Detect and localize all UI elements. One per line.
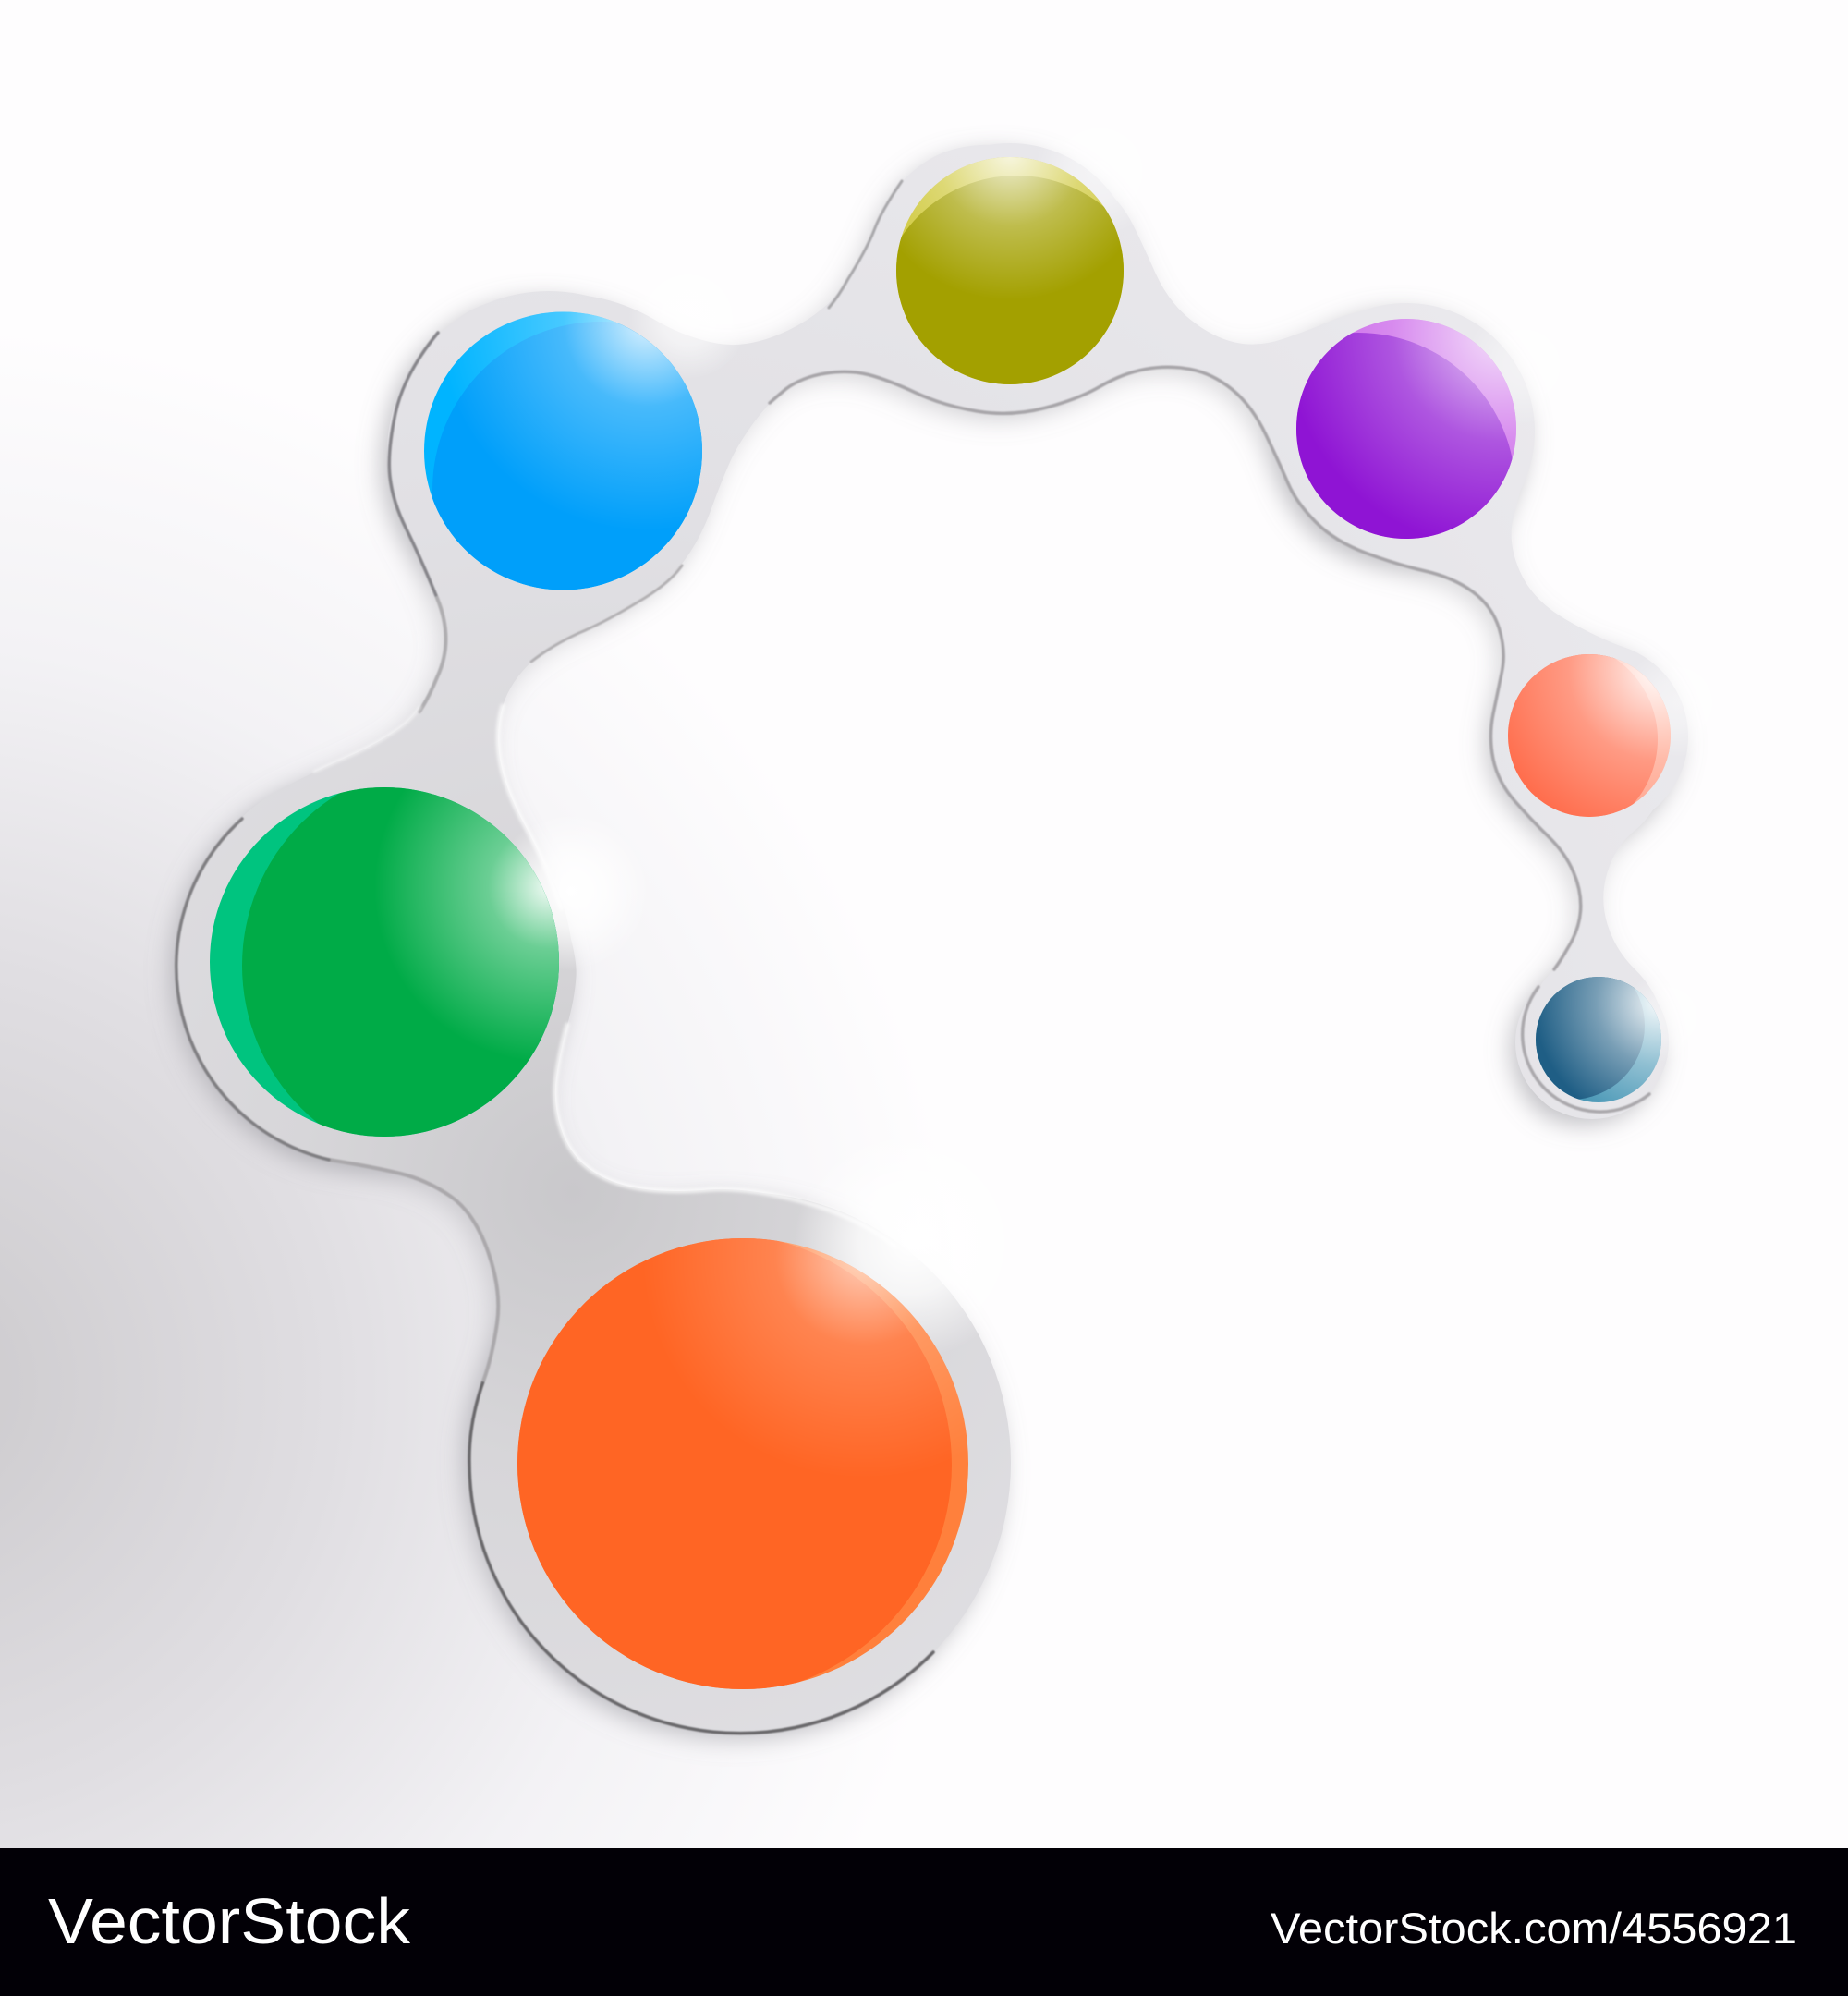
circle: teal <box>1536 977 1661 1102</box>
circle: orange <box>517 1238 968 1689</box>
circle: coral <box>1508 654 1671 817</box>
circle: olive <box>896 157 1124 384</box>
footer image id: VectorStock.com/4556921 <box>1270 1904 1797 1953</box>
plate shadow <box>169 151 1682 1741</box>
connected plate with soft shadow <box>169 106 1732 1741</box>
circle: purple <box>1296 319 1516 539</box>
plate dark edge lines <box>176 181 1649 1734</box>
circle: green <box>210 787 559 1137</box>
plate body <box>176 143 1688 1734</box>
footer bar <box>0 1848 1848 1996</box>
circle: blue <box>424 312 702 590</box>
plate glows <box>492 106 1732 1358</box>
footer brand: VectorStock <box>48 1885 411 1957</box>
plate white highlights <box>314 706 895 1247</box>
